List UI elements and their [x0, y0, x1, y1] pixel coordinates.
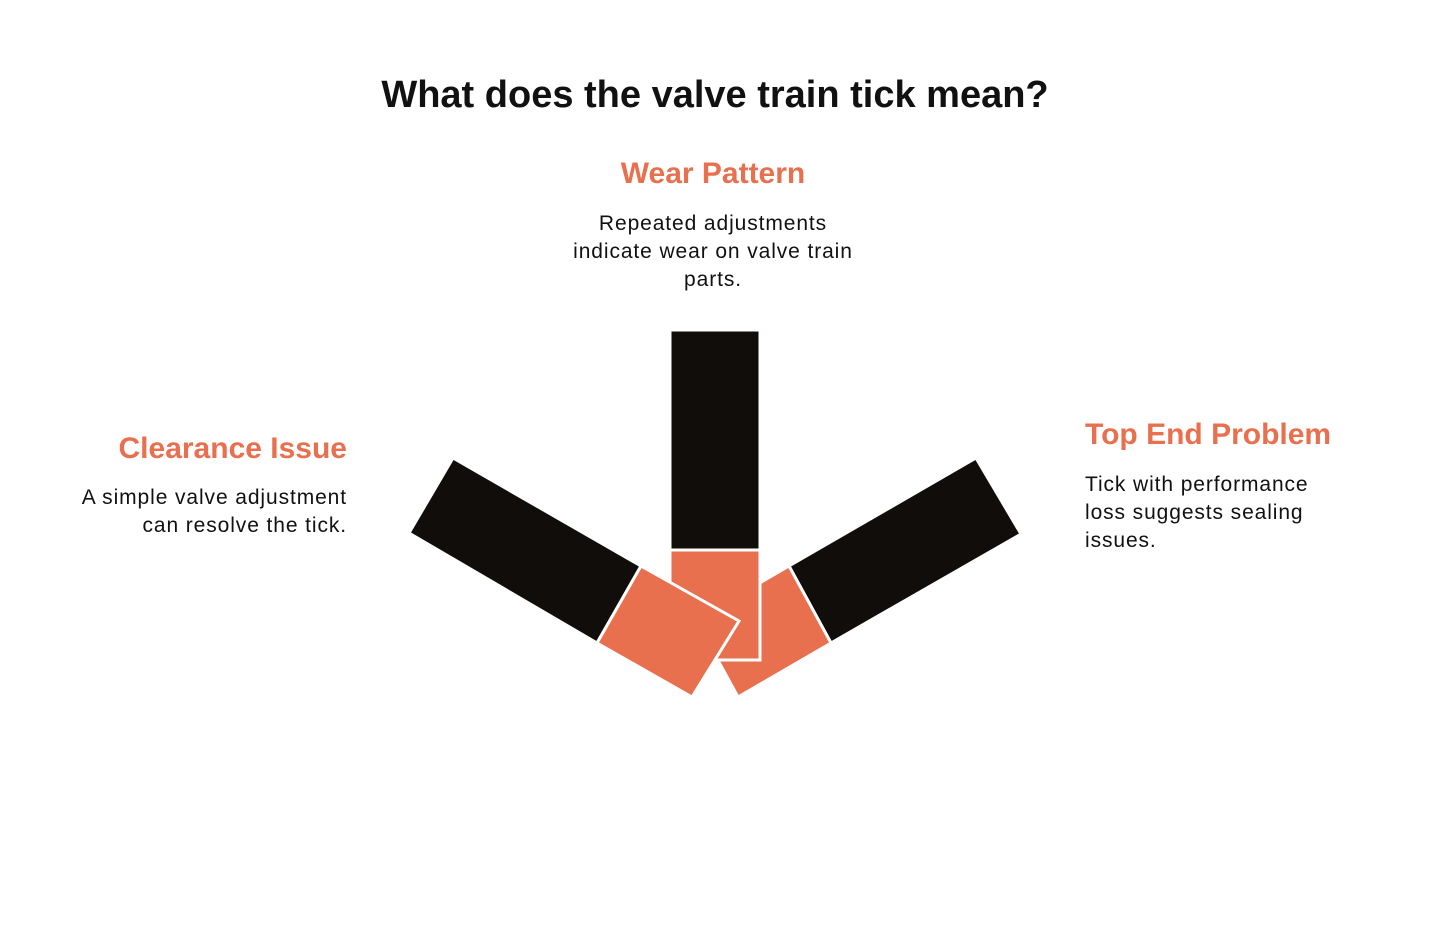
- arm: right: [696, 458, 1021, 697]
- block: wear pattern: [573, 157, 853, 291]
- arm: left: [409, 458, 739, 697]
- block: clearance issue: [82, 432, 347, 537]
- title: What does the valve train tick mean?: [381, 74, 1049, 116]
- arm: center: [670, 330, 760, 660]
- heading: wear pattern: Wear Pattern: [621, 157, 805, 190]
- heading: clearance issue: Clearance Issue: [119, 432, 347, 465]
- text: wear pattern: Repeated adjustments indicate wear on valve train parts.: [573, 212, 853, 291]
- text: top end problem: Tick with performance loss suggests sealing issues.: [1085, 473, 1309, 552]
- block: top end problem: [1085, 418, 1331, 552]
- heading: top end problem: Top End Problem: [1085, 418, 1331, 451]
- text: clearance issue: A simple valve adjustment can resolve the tick.: [82, 486, 347, 537]
